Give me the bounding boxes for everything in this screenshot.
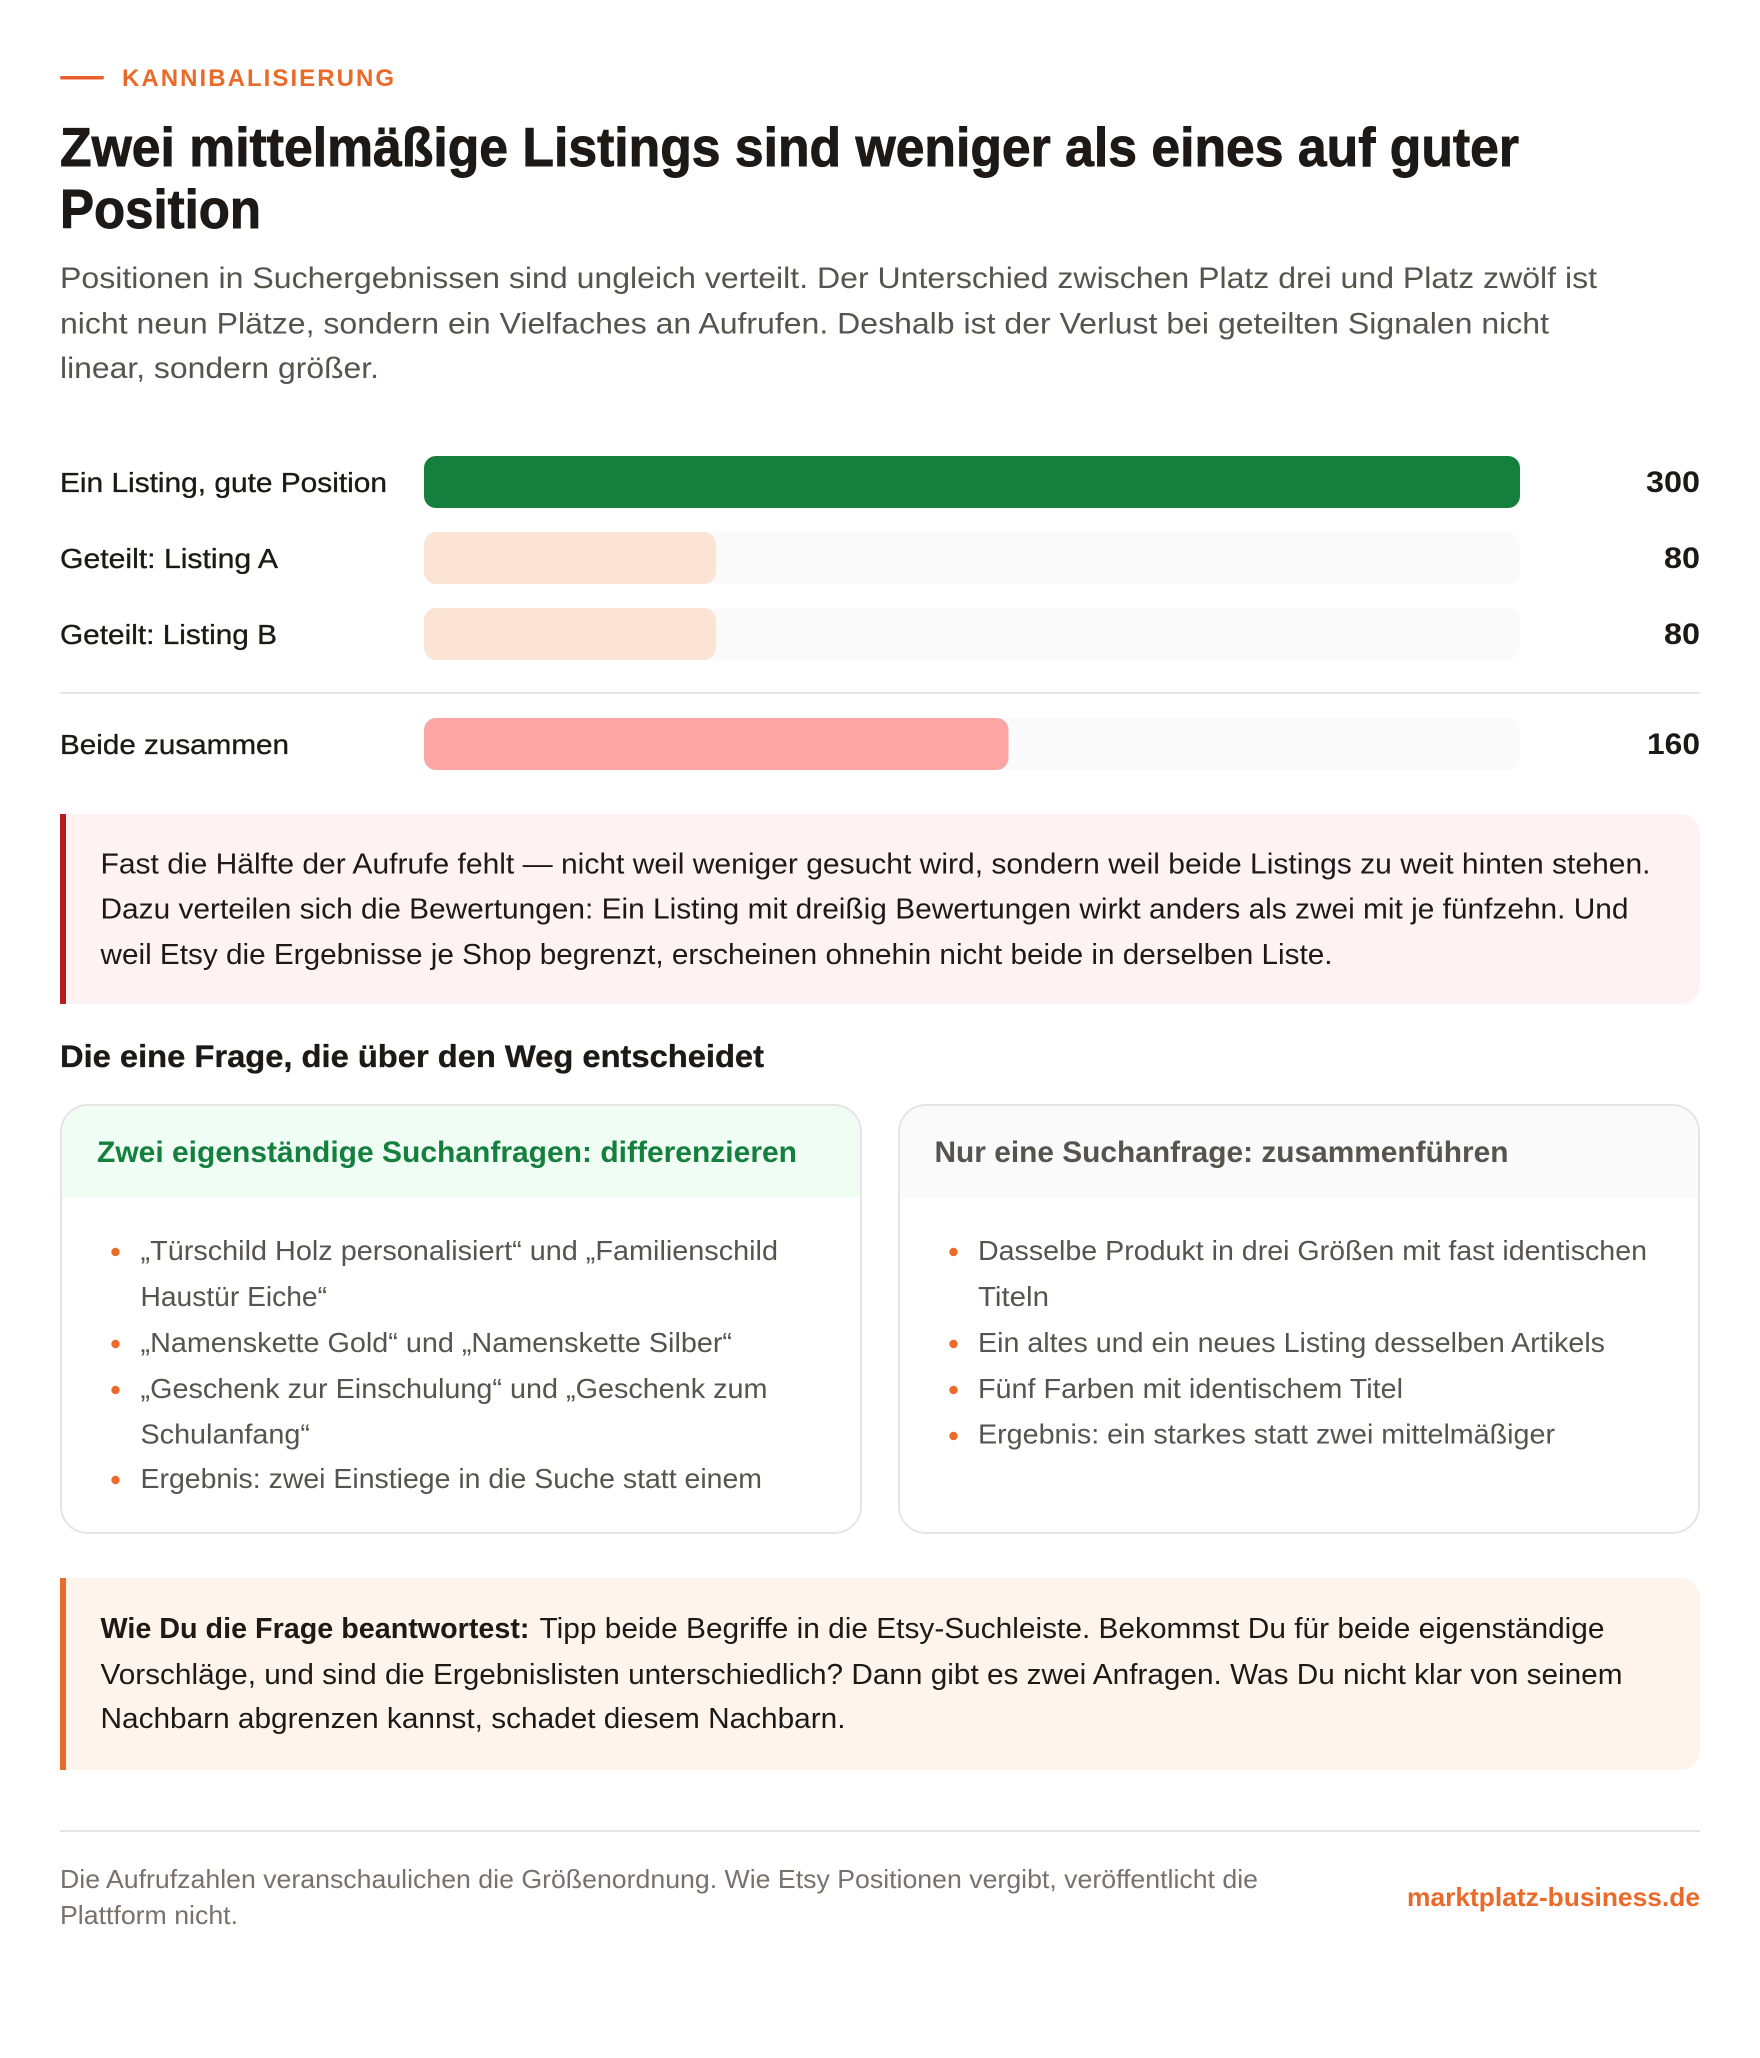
list: zusammenführen examples (949, 1235, 1647, 1450)
list: differenzieren examples: Schulanfang“ (140, 1418, 310, 1450)
title: Zwei mittelmäßige Listings sind weniger als eines auf guter (60, 117, 1519, 178)
list: differenzieren examples: „Türschild Holz personalisiert“ und „Familienschild (140, 1235, 778, 1266)
footer brand: marktplatz-business.de (1407, 1882, 1700, 1912)
panel header: differenzieren: Zwei eigenständige Suchanfragen: differenzieren (97, 1136, 797, 1169)
eyebrow: Kannibalisierung: KANNIBALISIERUNG (122, 65, 394, 92)
callout: fehlende Aufrufe: Fast die Hälfte der Aufrufe fehlt — nicht weil weniger gesucht wird, sondern weil beide Listings zu weit hinten stehen. (100, 848, 1650, 880)
bar row: Geteilt Listing B 80: 80 (1664, 618, 1700, 651)
bar row: Beide zusammen 160: Beide zusammen (60, 729, 289, 760)
bar row: Ein Listing, gute Position 300 (60, 456, 1700, 508)
bar row: Geteilt Listing B 80: Geteilt: Listing B (60, 619, 277, 650)
callout: wie Du die Frage beantwortest: Vorschläge, und sind die Ergebnislisten unterschiedlich? Dann gibt es zwei Anfragen. Was Du nicht klar von seinem (100, 1659, 1622, 1691)
panel header: differenzieren (61, 1105, 861, 1198)
list: differenzieren examples: Haustür Eiche“ (140, 1281, 327, 1312)
intro text: Positionen in Suchergebnissen sind ungleich verteilt. Der Unterschied zwischen Platz drei und Platz zwölf ist (60, 262, 1597, 295)
bar row: Geteilt Listing A 80: 80 (1664, 542, 1700, 575)
panel: zusammenführen (899, 1105, 1699, 1533)
list: differenzieren examples: „Geschenk zur Einschulung“ und „Geschenk zum (140, 1373, 768, 1404)
bar row: Beide zusammen 160: 160 (1647, 728, 1700, 761)
list: zusammenführen examples: Dasselbe Produkt in drei Größen mit fast identischen (978, 1235, 1647, 1266)
list: zusammenführen examples: Titeln (978, 1281, 1049, 1312)
footer note: Plattform nicht. (60, 1900, 238, 1930)
title: Position (60, 179, 261, 240)
bar row: Ein Listing, gute Position 300: 300 (1646, 466, 1700, 499)
bar row: Beide zusammen 160 (60, 718, 1700, 770)
panel: differenzieren (61, 1105, 861, 1533)
panel header: zusammenführen (899, 1105, 1699, 1198)
callout: fehlende Aufrufe (60, 814, 1700, 1004)
bar row: Geteilt Listing A 80: Geteilt: Listing A (60, 543, 278, 574)
title (60, 117, 1519, 240)
callout: fehlende Aufrufe: Dazu verteilen sich die Bewertungen: Ein Listing mit dreißig Bewertungen wirkt anders als zwei mit je fünfzehn. Und (100, 894, 1628, 926)
callout: wie Du die Frage beantwortest: Nachbarn abgrenzen kannst, schadet diesem Nachbarn. (100, 1703, 846, 1735)
intro text (60, 262, 1597, 385)
list: differenzieren examples: Ergebnis: zwei Einstiege in die Suche statt einem (140, 1463, 762, 1494)
callout: fehlende Aufrufe: weil Etsy die Ergebnisse je Shop begrenzt, erscheinen ohnehin nicht beide in derselben Liste. (99, 939, 1333, 971)
footer note: Die Aufrufzahlen veranschaulichen die Größenordnung. Wie Etsy Positionen vergibt, veröffentlicht die (60, 1864, 1258, 1894)
callout: wie Du die Frage beantwortest: Wie Du die Frage beantwortest: (100, 1613, 530, 1645)
bar row: Geteilt Listing B 80 (60, 608, 1700, 660)
callout: wie Du die Frage beantwortest: Tipp beide Begriffe in die Etsy-Suchleiste. Bekommst Du für beide eigenständige (540, 1613, 1604, 1645)
section heading: Die eine Frage, die über den Weg entscheidet (60, 1038, 765, 1074)
panel header: zusammenführen: Nur eine Suchanfrage: zusammenführen (934, 1136, 1508, 1169)
list: zusammenführen examples: Ergebnis: ein starkes statt zwei mittelmäßiger (978, 1418, 1555, 1450)
intro text: linear, sondern größer. (60, 352, 379, 385)
bar chart (60, 456, 1700, 770)
callout: wie Du die Frage beantwortest (60, 1578, 1700, 1770)
list: differenzieren examples (111, 1235, 778, 1494)
intro text: nicht neun Plätze, sondern ein Vielfaches an Aufrufen. Deshalb ist der Verlust bei geteilten Signalen nicht (60, 308, 1549, 340)
bar row: Ein Listing, gute Position 300: Ein Listing, gute Position (60, 467, 387, 498)
list: zusammenführen examples: Fünf Farben mit identischem Titel (978, 1373, 1403, 1404)
footer note (60, 1864, 1258, 1930)
list: zusammenführen examples: Ein altes und ein neues Listing desselben Artikels (978, 1327, 1605, 1358)
bar row: Geteilt Listing A 80 (60, 532, 1700, 584)
list: differenzieren examples: „Namenskette Gold“ und „Namenskette Silber“ (140, 1327, 732, 1358)
